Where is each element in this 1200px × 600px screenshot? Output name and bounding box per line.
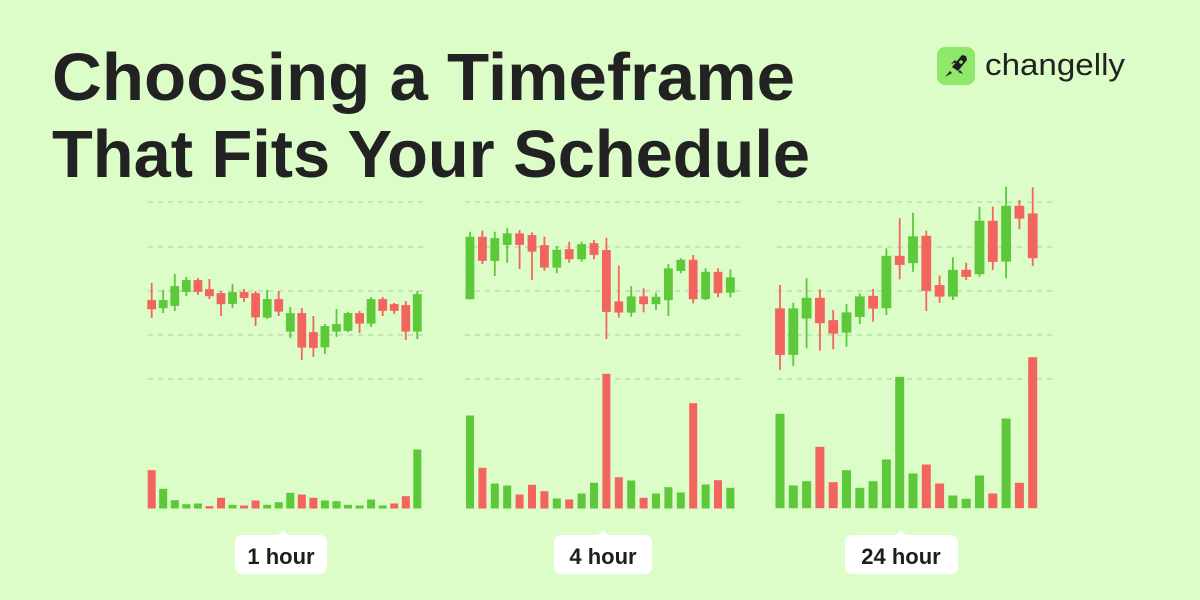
chart: 4 hour volume	[466, 374, 734, 508]
chart: 24 hour volume	[776, 358, 1037, 508]
label: 4 hour: 4 hour	[569, 544, 637, 569]
title: That Fits Your Schedule	[52, 117, 810, 192]
title: Choosing a Timeframe	[52, 40, 795, 115]
grid lines	[148, 202, 1052, 379]
chart: 4 hour candles	[466, 228, 734, 339]
logo: changelly	[937, 47, 1126, 85]
label: 24 hour	[845, 530, 958, 574]
label: 1 hour: 1 hour	[247, 544, 315, 569]
chart: 24 hour candles	[776, 187, 1037, 370]
label: 24 hour: 24 hour	[861, 544, 941, 569]
chart: 1 hour volume	[148, 450, 421, 508]
title	[52, 40, 810, 192]
label: 1 hour	[235, 530, 327, 574]
logo: changelly: changelly	[985, 47, 1126, 82]
chart: 1 hour candles	[148, 274, 421, 360]
label: 4 hour	[554, 530, 652, 574]
